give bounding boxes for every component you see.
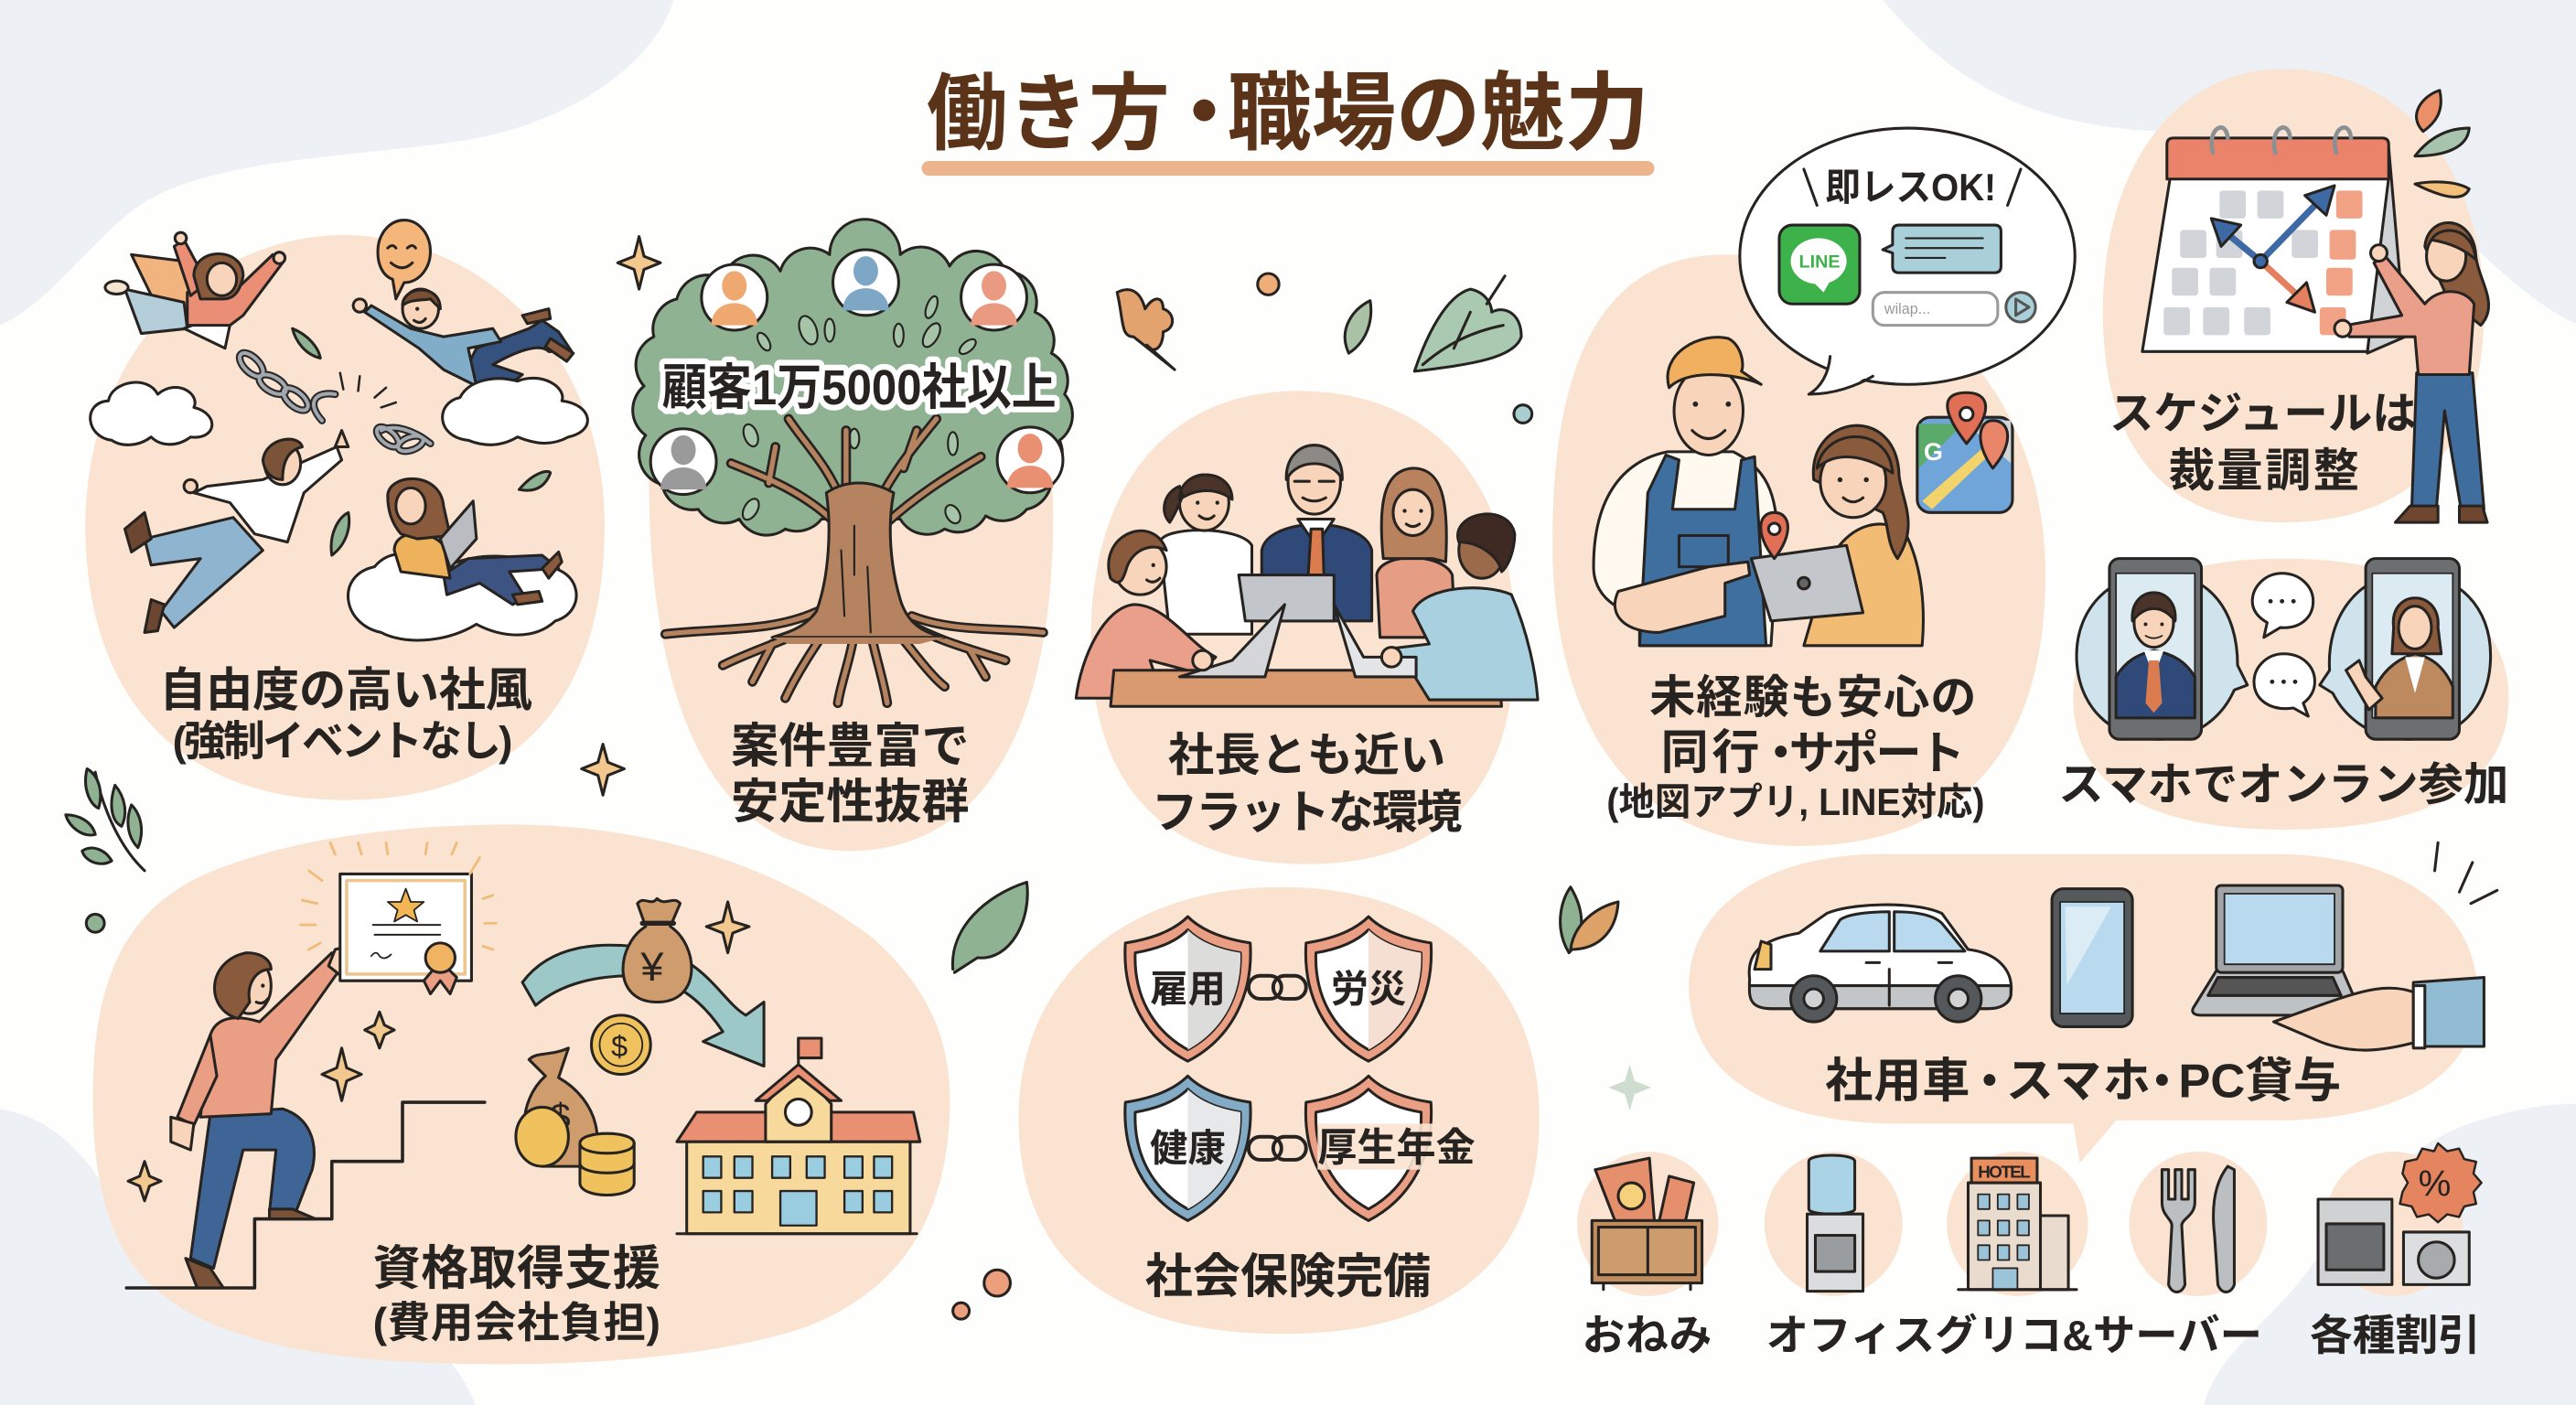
icon: shield nenkin: 厚生年金: [1317, 1127, 1476, 1171]
icon: map app: G: [1924, 438, 1943, 466]
panel: cutlery: [2130, 1152, 2267, 1296]
panel: support: [1552, 128, 2075, 846]
illustration: man in white shirt: [124, 431, 349, 632]
panel: lending: [1689, 842, 2497, 1164]
callout: speech bubble: [1740, 128, 2075, 394]
icon: water server: [1808, 1155, 1863, 1292]
panel: discounts: [2310, 1143, 2482, 1359]
icon: car: [1749, 905, 2012, 1022]
icon: laptop: [2193, 885, 2359, 1015]
label: qualification: 資格取得支援: [373, 1242, 660, 1295]
icon: coin: [592, 1015, 650, 1075]
icon: sparkles: [128, 902, 749, 1201]
icon: shield koyo: 雇用: [1150, 969, 1226, 1011]
icon: curved arrow: [522, 945, 764, 1067]
icon: coin: $: [611, 1030, 628, 1063]
title: 職場の魅力: [1228, 65, 1649, 161]
icon: smartphone: [2052, 889, 2132, 1026]
panel: hotel: [1947, 1152, 2088, 1296]
icon: chains: [1249, 976, 1306, 1160]
panel: snacks: [1577, 1152, 1719, 1359]
sublabel: qualification: (費用会社負担): [373, 1299, 660, 1346]
illustration: clouds: [91, 378, 587, 640]
icon: leaves: [293, 328, 551, 555]
illustration: stairs: [126, 1102, 485, 1288]
icon: decorative branch and leaves: [66, 768, 1651, 1319]
icon: LINE: [1779, 225, 1860, 304]
icon: client avatars: [650, 250, 1063, 495]
icon: dollar bag and coins: [516, 1048, 634, 1196]
illustration: woman at calendar: [2334, 222, 2489, 522]
icon: hotel: HOTEL: [1978, 1163, 2031, 1182]
icon: map pin: [1761, 512, 1787, 559]
icon: chat message: [1883, 225, 2001, 273]
callout: speech bubble: 即レスOK!: [1825, 166, 1996, 209]
icon: broken chain: [236, 349, 431, 455]
illustration: woman with laptop on cloud: [388, 478, 562, 605]
label: discounts: 各種割引: [2310, 1312, 2481, 1359]
label: online: スマホでオンラン参加: [2058, 760, 2508, 810]
icon: yen money bag: ¥: [639, 943, 664, 990]
illustration: tree: [633, 220, 1072, 703]
label: freedom: 自由度の高い社風: [159, 664, 532, 716]
icon: shield rousai: [1305, 917, 1432, 1061]
label: schedule: スケジュールは: [2109, 390, 2417, 439]
icon: hand: [2274, 978, 2484, 1050]
illustration: man flying: [353, 289, 574, 388]
panel: qualification: [93, 824, 950, 1364]
input box: [1873, 293, 1998, 326]
icon: discount badge: [2399, 1143, 2482, 1222]
title: ・: [1162, 65, 1247, 161]
illustration: left phone: [2077, 559, 2248, 739]
icon: hotel: [1959, 1158, 2077, 1290]
label: tree: 案件豊富で: [731, 720, 970, 773]
illustration: certificate: [301, 842, 496, 994]
illustration: right phone: [2320, 559, 2491, 739]
icon: dollar bag and coins: $: [551, 1097, 571, 1137]
icon: shield kenko: 健康: [1150, 1128, 1226, 1170]
icon: shield kenko: [1125, 1076, 1250, 1220]
label: snacks: おねみ: [1582, 1312, 1712, 1359]
icon: shield koyo: [1125, 917, 1250, 1061]
icon: shield rousai: 労災: [1331, 969, 1406, 1011]
label: office glico and server: オフィスグリコ&サーバー: [1766, 1312, 2262, 1359]
panel: schedule: [2103, 69, 2489, 522]
icon: send button: [2006, 293, 2035, 322]
icon: oven: [2318, 1199, 2392, 1284]
panel: social insurance: [1018, 887, 1540, 1334]
label: support: 未経験も安心の: [1649, 670, 1976, 723]
icon: washing machine: [2403, 1232, 2469, 1284]
label: lending: スマホ: [2006, 1056, 2151, 1109]
panel: flat environment: [1076, 391, 1538, 864]
icon: discount badge: %: [2419, 1163, 2451, 1204]
icon: shield nenkin: [1305, 1076, 1476, 1220]
sublabel: tree: 安定性抜群: [731, 776, 970, 829]
sublabel: support: [1661, 726, 1965, 779]
note: support: (地図アプリ, LINE対応): [1606, 781, 1984, 823]
icon: smiley bubble: [378, 220, 430, 299]
illustration: woman with tablet: [1751, 425, 1923, 646]
label: lending: [1825, 1056, 2341, 1109]
sublabel: schedule: 裁量調整: [2169, 445, 2359, 497]
sublabel: support: ・: [1758, 726, 1804, 778]
icon: yen money bag: [623, 898, 692, 1003]
illustration: team at table: [1076, 445, 1538, 706]
input box: wilap...: [1884, 301, 1930, 317]
sublabel: flat: フラットな環境: [1152, 786, 1462, 838]
illustration: climbing man: [171, 946, 359, 1288]
sublabel: support: サポート: [1789, 726, 1965, 778]
title: 働き方: [927, 68, 1170, 161]
panel: online: [2058, 559, 2508, 830]
icon: fork and knife: [2162, 1166, 2234, 1292]
illustration: woman on paper plane: [105, 232, 285, 349]
title: [922, 65, 1654, 176]
panel: freedom: [85, 220, 605, 800]
illustration: calendar: [2142, 127, 2405, 353]
panel: tree: [633, 220, 1072, 851]
icon: accent petals: [2415, 91, 2469, 197]
icon: chat bubbles: [2252, 574, 2314, 716]
icon: snack cabinet: [1592, 1158, 1702, 1290]
icon: LINE: LINE: [1799, 252, 1841, 273]
icon: schedule arrows: [2211, 186, 2334, 312]
sublabel: support: 同行: [1661, 726, 1759, 779]
sublabel: freedom: (強制イベントなし): [173, 718, 512, 765]
callout: customers: 顧客1万5000社以上: [662, 360, 1057, 415]
illustration: school: [677, 1038, 920, 1234]
panel: water server: [1765, 1152, 1903, 1296]
label: social insurance: 社会保険完備: [1145, 1250, 1431, 1303]
accent lines: [2435, 842, 2497, 904]
icon: map app: [1917, 392, 2012, 512]
label: flat: 社長とも近い: [1168, 728, 1445, 780]
icon: decorative leaves and dots: [582, 237, 1532, 795]
label: lending: PC貸与: [2178, 1056, 2341, 1109]
label: lending: ・: [1967, 1056, 2012, 1108]
label: lending: 社用車: [1825, 1056, 1970, 1109]
illustration: man with cap: [1594, 338, 1777, 646]
label: lending: ・: [2139, 1056, 2185, 1108]
